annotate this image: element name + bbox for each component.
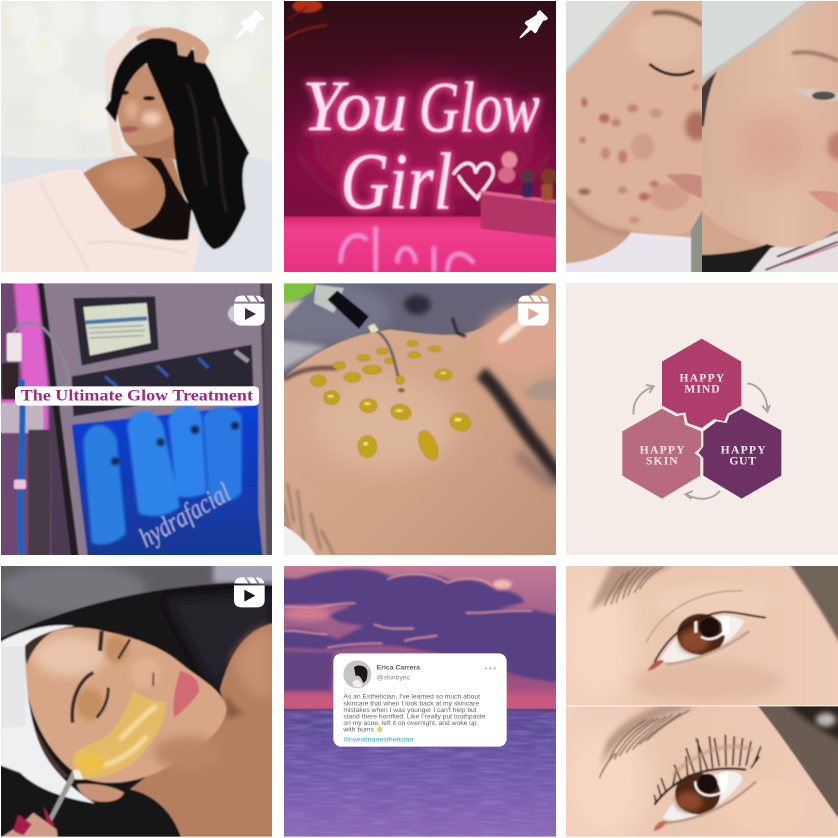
photo: You Glow Girl neon sign [277, 0, 563, 280]
photo: hydrafacial machine [0, 276, 279, 562]
quote body: skincare that when I look back at my skincare [343, 700, 479, 707]
neon text [305, 80, 540, 210]
photo: serum drops on forehead [264, 276, 567, 562]
towel [702, 1, 808, 82]
hair [105, 36, 249, 249]
knob [228, 305, 245, 322]
iris [675, 773, 720, 814]
panel: happy mind skin gut diagram [566, 283, 838, 555]
acne marks [578, 84, 699, 223]
photo: lash lift before and after [559, 559, 838, 838]
towel [566, 1, 632, 71]
machine frame [39, 276, 267, 562]
brush and hand [0, 770, 83, 838]
lashes [654, 612, 766, 663]
emoji [377, 727, 382, 732]
tear duct [653, 821, 668, 831]
rose wall [1, 15, 272, 116]
raised sleeve [105, 26, 157, 157]
brows and lashes [72, 631, 130, 723]
hair [702, 72, 718, 128]
neon glow [302, 66, 540, 226]
hexagon: happy mind: HAPPY [679, 372, 725, 385]
neon glow: You [302, 66, 407, 146]
photo: acne before and after [559, 0, 838, 279]
neon glow: Glow [419, 68, 540, 148]
nose [827, 132, 838, 160]
sea [277, 710, 563, 838]
eye white [663, 771, 743, 820]
hair [32, 719, 68, 779]
ear [77, 784, 124, 802]
icon: pin [519, 10, 548, 38]
neck [125, 133, 178, 160]
bottles [83, 405, 242, 545]
hexagon: happy mind: MIND [684, 382, 720, 395]
icon: reels [518, 296, 549, 326]
neon glow: Girl [341, 138, 452, 226]
quote body: on my acne, left it on overnight, and woke up [343, 720, 477, 727]
wall below roses [0, 155, 279, 279]
quote body: stand there horrified. Like I really put toothpaste [343, 713, 486, 720]
closed eye [649, 12, 702, 75]
icon: reels [234, 296, 265, 326]
neon text: Glow [419, 68, 540, 148]
hairline [284, 483, 334, 555]
neck and shoulder [130, 623, 279, 838]
hexagon: happy skin [622, 409, 701, 499]
serum drops [311, 340, 473, 463]
face shape [676, 1, 702, 233]
clouds [277, 569, 563, 691]
gift box [481, 191, 556, 237]
after eye [566, 706, 838, 837]
balloon and dolls [498, 151, 557, 201]
quote card [333, 653, 507, 747]
yellow mask [73, 690, 166, 779]
handle: @skinbyec [377, 675, 410, 682]
brow [589, 563, 676, 613]
upper lid [654, 769, 746, 805]
shoulder [83, 155, 187, 233]
name: Erica Carrera [377, 664, 421, 671]
control panel [72, 345, 253, 416]
photo: yellow mask being brushed on face [0, 559, 279, 838]
brow [599, 703, 699, 771]
hashtag: #investinanesthetician [343, 737, 414, 744]
banner: The Ultimate Glow Treatment: The Ultimate Glow Treatment [21, 387, 254, 404]
quote body: mistakes when I was younger I can't help but [343, 707, 477, 714]
hexagon: happy skin: HAPPY [640, 444, 685, 457]
tear duct [648, 660, 664, 671]
lips [808, 191, 838, 213]
face [117, 65, 176, 145]
eye white [659, 616, 744, 662]
photo: woman with dark curly hair [0, 0, 280, 279]
arrow: gut to skin [685, 491, 720, 499]
hexagon: happy mind [662, 339, 741, 428]
icon: pin [235, 10, 264, 38]
floor reflection [341, 227, 474, 272]
open eye [792, 52, 838, 101]
more dots [485, 667, 496, 669]
black cushion [0, 583, 279, 838]
lifted lashes [654, 735, 761, 803]
applicator [277, 276, 398, 376]
lips [173, 671, 199, 718]
quote body: As an Esthetician, I've learned so much about [343, 694, 480, 701]
floor [284, 215, 556, 272]
neon text: You [302, 66, 407, 146]
nose [685, 111, 708, 141]
face [25, 628, 227, 783]
eyebrow [481, 373, 561, 480]
avatar [343, 660, 371, 688]
lower lash line [666, 781, 756, 823]
bathrobe [0, 170, 200, 279]
arrow: mind to gut [747, 383, 770, 412]
icon: reels [234, 577, 265, 607]
lower lid [666, 631, 749, 664]
neon text: Girl [341, 138, 452, 226]
quote body [342, 694, 486, 734]
photo: sunset sea with quote card [277, 559, 563, 838]
pink light strip [0, 276, 50, 562]
neon heart [454, 163, 493, 198]
cloud glow edges [284, 574, 532, 648]
hydrafacial logo: hydrafacial [134, 477, 236, 554]
iris [677, 614, 725, 655]
shirt [566, 232, 692, 272]
upper brow hairs [284, 368, 337, 380]
headband [0, 625, 95, 803]
before eye [566, 566, 838, 706]
crease [646, 591, 743, 643]
blue bottle window [72, 405, 263, 562]
face shape [754, 2, 838, 248]
hand [136, 27, 209, 63]
lips [666, 174, 702, 198]
face [277, 280, 563, 562]
nose [130, 658, 160, 688]
after panel [702, 1, 838, 272]
flower branch [284, 0, 327, 40]
arrow: skin to mind [633, 385, 654, 415]
hexagon: happy gut [699, 409, 781, 499]
hexagon: happy gut: HAPPY [721, 444, 766, 457]
nostril area [524, 376, 563, 400]
quote body: with bums [342, 727, 375, 734]
hexagon: happy skin: SKIN [646, 455, 678, 468]
hexagon: happy gut: GUT [729, 455, 756, 468]
screen [73, 296, 159, 366]
tube [20, 380, 22, 555]
black top [129, 155, 192, 240]
top [702, 243, 776, 272]
eyes and lips [119, 90, 155, 133]
before panel [566, 1, 702, 272]
